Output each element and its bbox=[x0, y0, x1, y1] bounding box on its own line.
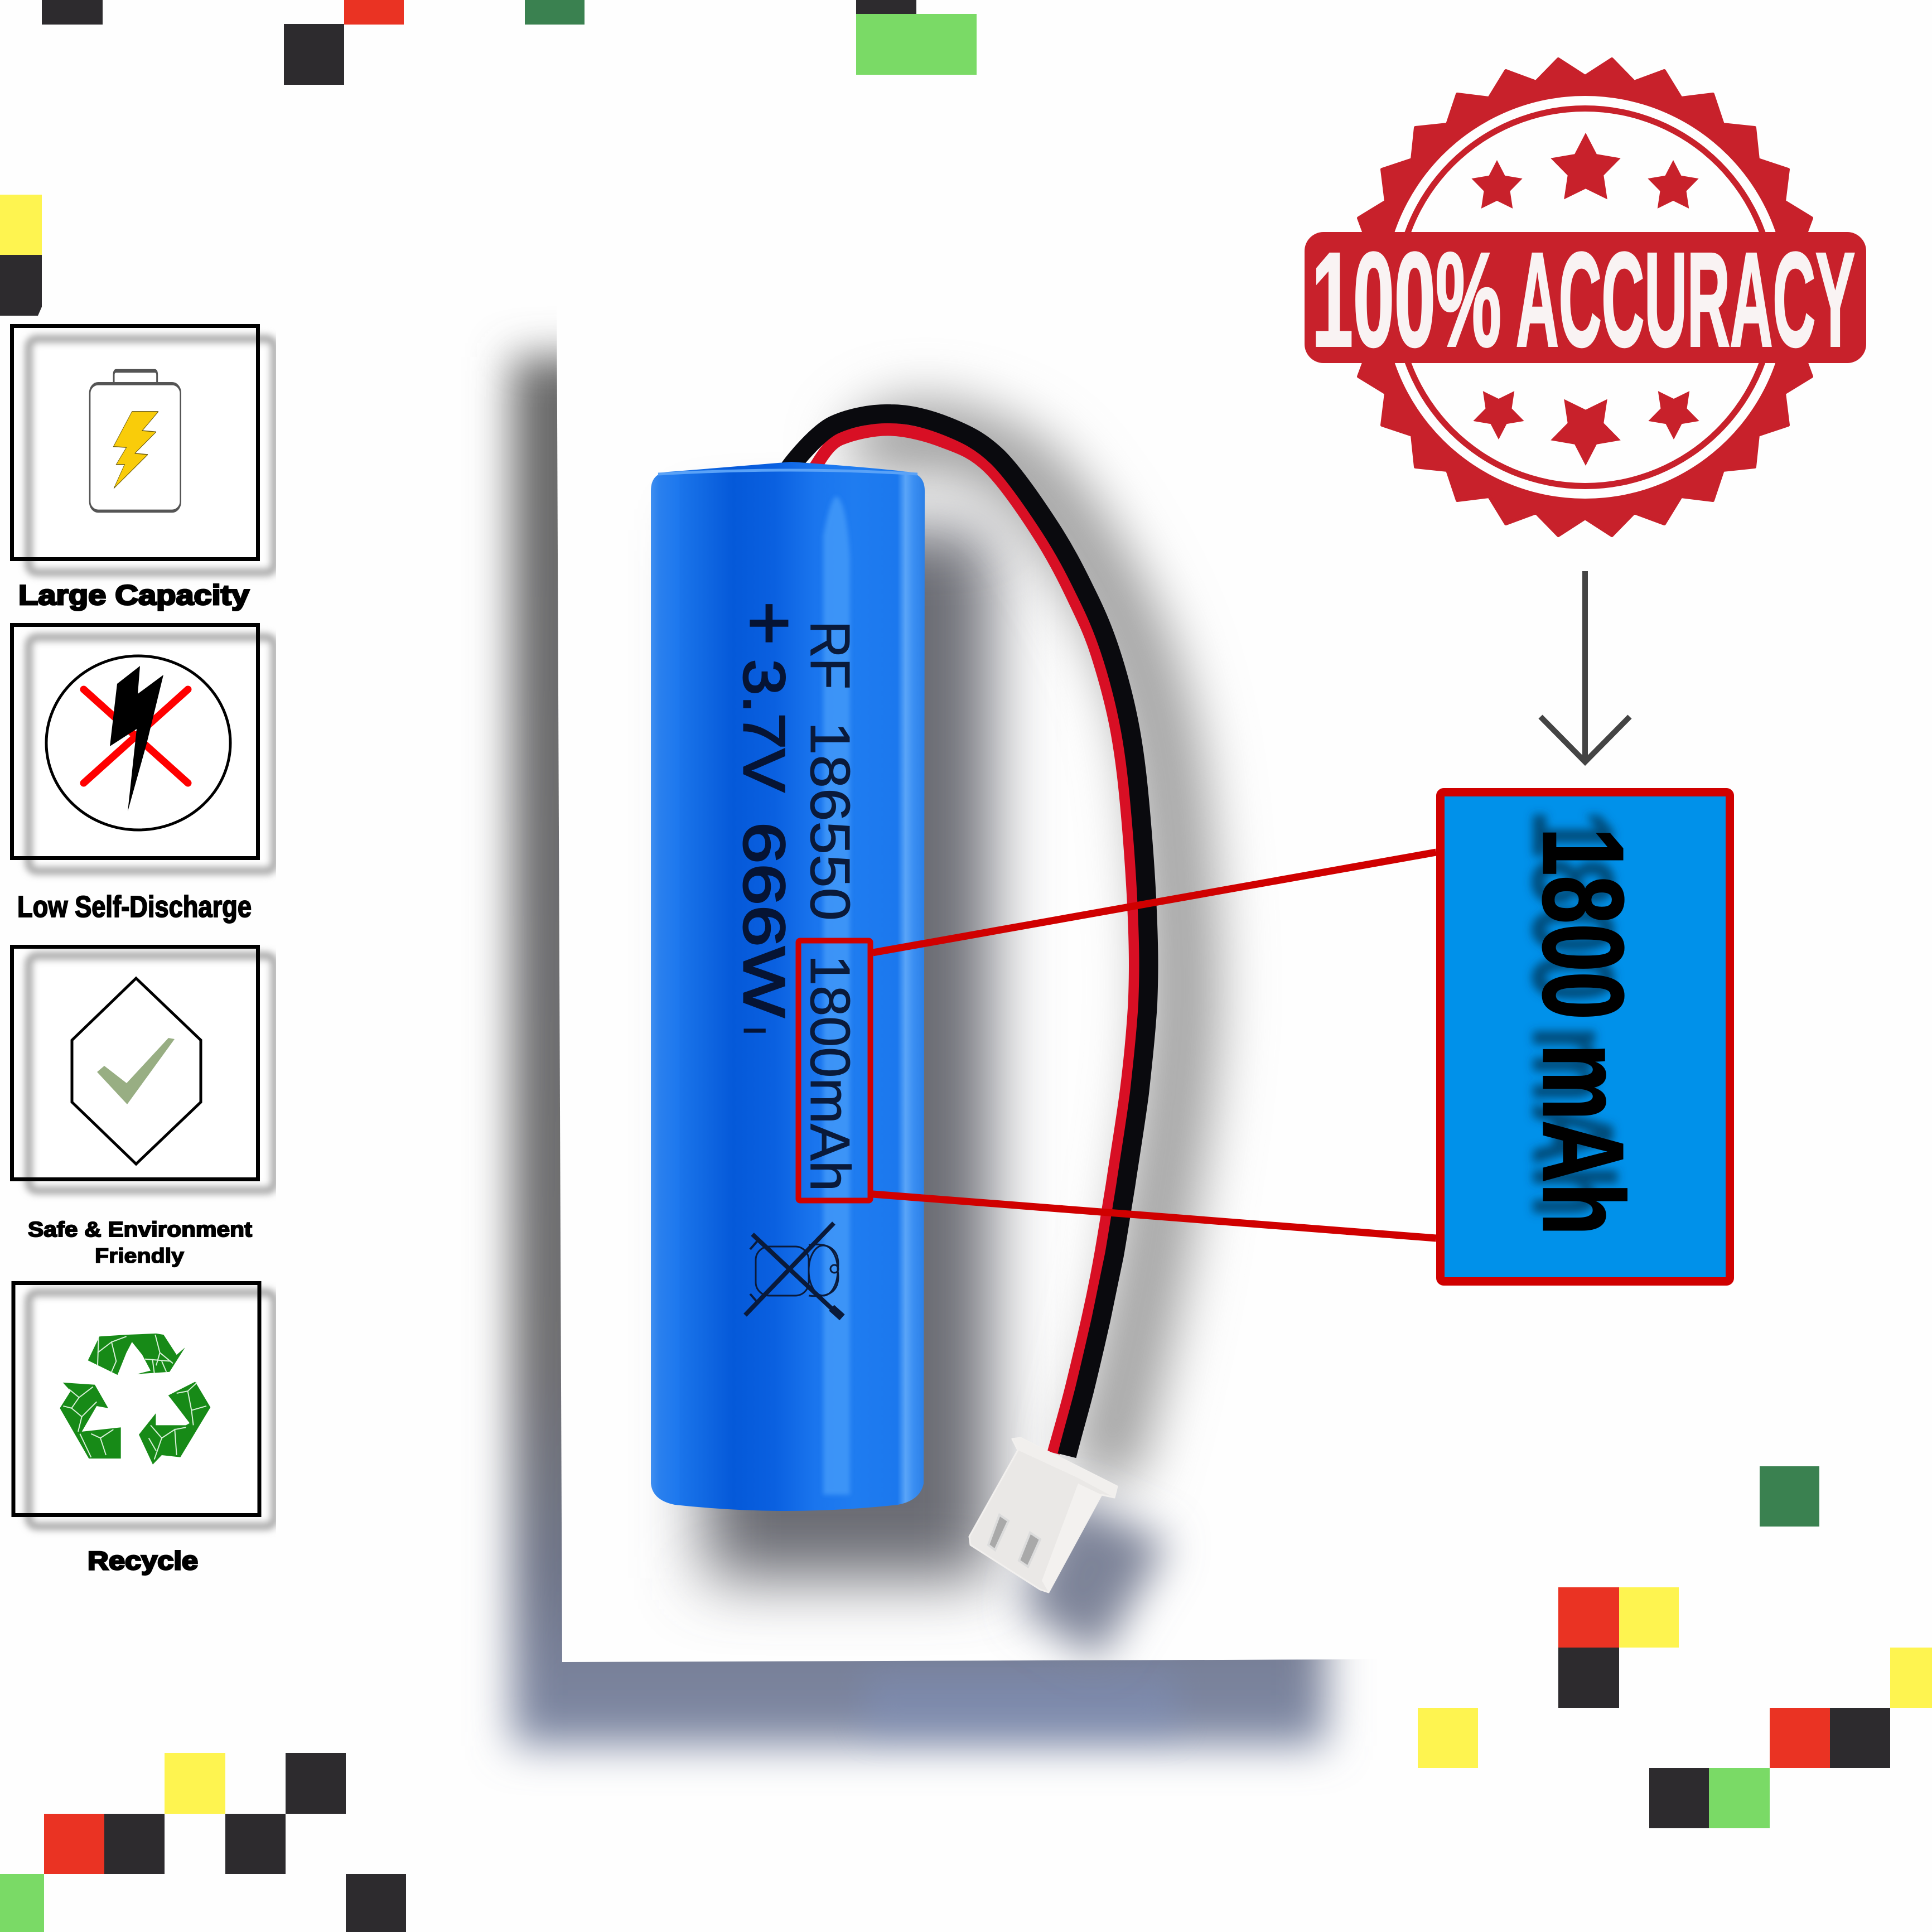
battery label: model: RF bbox=[799, 621, 861, 689]
paper shadow bbox=[512, 357, 1326, 1746]
battery label: voltage: + bbox=[728, 601, 812, 645]
badge stars: bottom bbox=[1473, 391, 1699, 466]
label: recycle: Recycle bbox=[88, 1546, 198, 1575]
badge stars: top bbox=[1471, 133, 1699, 209]
callout lines bbox=[873, 852, 1436, 1238]
icon: crossed-out bin bbox=[745, 1223, 842, 1317]
battery label: model: 186550 bbox=[799, 722, 861, 921]
icon: recycle arrows bbox=[60, 1334, 210, 1465]
white paper sheet bbox=[557, 279, 1378, 1662]
battery label: voltage: ı bbox=[735, 1025, 780, 1036]
panel: low self-discharge bbox=[12, 625, 274, 871]
panel: large capacity bbox=[12, 326, 274, 572]
label: safe and environment friendly: Friendly bbox=[95, 1244, 184, 1267]
badge band with text: 100% bbox=[1312, 225, 1501, 374]
panel: safe and environment friendly bbox=[12, 947, 274, 1190]
wire: black bbox=[789, 414, 1149, 1456]
label: safe and environment friendly: Safe & Environment bbox=[28, 1218, 252, 1242]
decorative squares: top left bbox=[0, 0, 977, 316]
icon: hexagon check bbox=[72, 978, 201, 1164]
decorative squares: bottom right bbox=[1418, 1466, 1932, 1828]
icon: no discharge bolt bbox=[46, 656, 230, 830]
badge band with text bbox=[1305, 225, 1866, 374]
battery shadows bbox=[706, 436, 1182, 1659]
connector slots bbox=[988, 1515, 1040, 1567]
red highlight rectangle bbox=[799, 940, 870, 1200]
label: safe and environment friendly bbox=[28, 1218, 252, 1267]
battery cell bbox=[651, 462, 925, 1511]
badge: 100% accuracy bbox=[1305, 59, 1866, 535]
arrow bbox=[1540, 571, 1630, 763]
label: large capacity: Large Capacity bbox=[18, 579, 249, 611]
battery label: model: 1800mAh bbox=[799, 955, 861, 1191]
decorative squares: bottom left bbox=[0, 1753, 406, 1932]
battery label: model bbox=[799, 621, 861, 1191]
panel: recycle bbox=[13, 1283, 274, 1526]
battery label: voltage: 666W bbox=[731, 822, 796, 1017]
label: low self-discharge: Low Self-Discharge bbox=[17, 890, 252, 924]
battery label: voltage bbox=[728, 601, 812, 1036]
icon: battery with bolt bbox=[90, 371, 181, 511]
connector plug bbox=[969, 1438, 1117, 1592]
callout box: 1800 mAh bbox=[1440, 792, 1730, 1282]
wire: red bbox=[814, 429, 1136, 1453]
battery label: voltage: 3.7V bbox=[731, 659, 796, 792]
callout box: 1800 mAh: 1800 mAh bbox=[1519, 828, 1647, 1235]
